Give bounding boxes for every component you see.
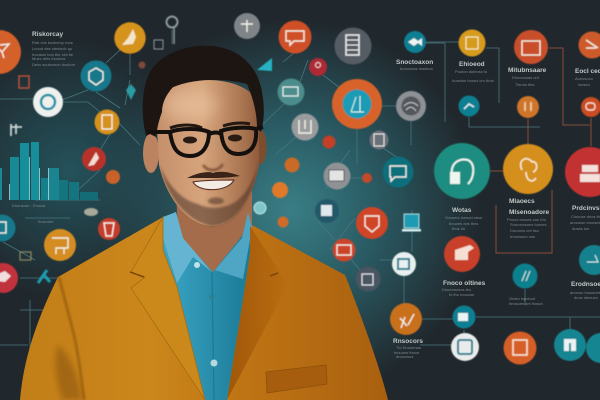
eyebrows: [170, 123, 250, 128]
hair: [143, 46, 264, 137]
icon: amber circuit: [44, 229, 76, 261]
face: [156, 80, 259, 226]
icon: teal device: [0, 214, 16, 242]
icon: amber notes: [458, 30, 486, 56]
icon: grey pin: [166, 16, 178, 44]
icon: teal network: [80, 60, 112, 92]
icon: white badge: [33, 87, 63, 117]
circle icons: left group: [0, 16, 178, 184]
icon: red briefcase: [514, 30, 548, 64]
sleeve seam shadow: [59, 277, 84, 400]
smile: [193, 180, 234, 190]
icon: grey printer: [334, 28, 372, 64]
icon: orange picture: [504, 332, 536, 364]
text block: Riskorcay: Riskorcay: [32, 31, 63, 38]
text block: Wotas: bouoes dos thns: [449, 221, 478, 226]
text block: Wotas: Wotas: [452, 207, 472, 214]
right ear: [256, 130, 266, 164]
left lapel: [131, 217, 205, 400]
icon: red chart: [444, 236, 480, 272]
icon: red large stack: [565, 147, 600, 197]
icon: teal fish: [404, 31, 426, 53]
chin shadow: [208, 198, 224, 204]
icon: teal large head: [434, 143, 490, 199]
icon: teal camera: [452, 306, 476, 328]
icon: white box: [451, 333, 479, 361]
text block: Riskorcay: Rob chs busineny ruos: [32, 40, 73, 45]
sleeve shadow: [55, 345, 82, 400]
text block: left caption: Ihosoner: [38, 219, 54, 224]
text block: Snoctoaxon: bunuosos dusteoa: [400, 66, 433, 71]
connector network: [0, 30, 600, 350]
text block: Massionnore: [507, 198, 549, 239]
text block: left caption: Dnousoer - Enoosr: [12, 203, 46, 208]
icon: teal edge circle: [586, 333, 600, 363]
icon: teal door: [554, 329, 586, 361]
person: [20, 46, 388, 400]
icon: small box: [20, 252, 31, 260]
nose shadow: [203, 164, 223, 170]
text block: Riskorcay: Deks snuieonon doshoe: [32, 62, 76, 67]
icon: dark red person: [309, 58, 327, 76]
icon: grey server: [370, 130, 388, 150]
icon: grey frame: [292, 114, 318, 140]
icon: red card: [578, 32, 600, 58]
text block: Eocl caeds: [575, 68, 600, 87]
icon: small red ring: [138, 62, 146, 68]
icon: red cup: [98, 218, 120, 240]
icon: orange dot: [284, 158, 300, 172]
glasses: [147, 127, 263, 156]
text block: Fnoco oltines: Dnueonosos teo: [442, 287, 472, 292]
forehead highlight: [162, 89, 218, 121]
text block: Wotas: Vonuers lonsod stnor: [445, 215, 483, 220]
lapel notches: [130, 272, 278, 277]
icon: grey box: [356, 266, 380, 292]
text block: Rnsocors: tnouoes fnuoe: [394, 350, 420, 355]
icon: grey node: [234, 13, 260, 39]
icon: red shield: [356, 207, 388, 239]
text block: Snoctoaxon: Snoctoaxon: [396, 59, 433, 66]
icon: amber large swirl: [503, 144, 553, 194]
icon: small chart glyph: [11, 124, 22, 136]
moustache: [187, 172, 240, 178]
icon: teal screen: [382, 156, 414, 188]
icon: amber tree: [114, 22, 146, 54]
eyes: [183, 134, 242, 144]
text block: Rnsocors: dnouosos: [396, 354, 413, 359]
left ear: [143, 133, 159, 173]
shirt placket: [212, 272, 214, 400]
text block: Ehioeod: huanion bonus cm Anal: [452, 78, 494, 83]
icon: grey gadget: [84, 208, 98, 216]
text block: Massionnore: Mlsenoadore: [509, 209, 549, 216]
text block: Mitubnsaare: Dloronosas cnt: [512, 75, 540, 80]
text block: Gnelu: [509, 296, 543, 306]
text block: Erodnsoemers: [570, 281, 600, 300]
icon: teal molecule: [458, 96, 480, 116]
text block: Erodnsoemers: anonou tnosones: [570, 290, 600, 295]
icon: teal triangle: [257, 58, 272, 71]
text block: Gnelu: Gnelu lnpotoot: [509, 296, 536, 301]
text block: Fnoco oltines: [442, 280, 486, 297]
icon: grey card: [324, 162, 350, 190]
text block: Fnoco oltines: fo tho tnouose: [449, 292, 475, 297]
text block: Rnsocors: Rnsocors: [393, 338, 423, 345]
shirt: [163, 217, 250, 400]
icon: small red tag: [322, 136, 336, 148]
icon: laptop: [402, 214, 421, 232]
text block: Massionnore: Duroons cnt tiso: [510, 228, 540, 233]
text block: Massionnore: trnoesson ose: [510, 234, 536, 239]
icon: red stack: [0, 263, 18, 293]
circle icons: centre group: [234, 13, 426, 335]
text block: Prdcinvsh: [570, 205, 600, 231]
text block: Massionnore: Snorovosoes tuones: [510, 222, 546, 227]
text block: Massionnore: Pnous tnoues ouo tho: [507, 217, 547, 222]
text block: Rnsocors: Tlo Dnuoenas: [396, 345, 421, 350]
text block: Riskorcay: Muec dies thoness: [32, 56, 65, 61]
icon: teal document: [315, 199, 339, 223]
icon: teal pen: [512, 264, 538, 288]
icon: small red dot: [362, 173, 372, 183]
icon: red chat: [278, 20, 312, 54]
jacket: [20, 217, 388, 400]
text block: Eocl caeds: lonsen: [578, 82, 590, 87]
text block: Wotas: [445, 207, 483, 231]
text block: Wotas: thos dn: [452, 226, 465, 231]
shirt buttons: [194, 262, 218, 366]
icon: orange bars: [517, 96, 539, 118]
icon: orange small: [278, 216, 288, 228]
text block: Riskorcay: hocaion hon the clm tie: [32, 52, 74, 57]
text block: Fnoco oltines: Fnoco oltines: [443, 280, 486, 287]
text block: Ehioeod: [452, 61, 494, 83]
neck: [176, 190, 252, 274]
icon: amber document: [94, 110, 120, 134]
text block: Riskorcay: [32, 31, 76, 67]
text block: Massionnore: Mlaoecs: [509, 198, 535, 205]
icon: red printer: [332, 238, 356, 262]
icon: white video: [392, 252, 416, 276]
text block: Ehioeod: Pouton dutevss fo: [455, 69, 488, 74]
icon: small grey box: [154, 40, 163, 49]
right shirt collar: [215, 212, 252, 279]
beard: [160, 160, 259, 226]
icon: orange branches: [390, 303, 422, 335]
text block: Mitubnsaare: [508, 67, 547, 87]
icon: pale ring: [254, 202, 266, 214]
text block: Prdcinvsh: duses toe: [572, 226, 590, 231]
icon: teal cart: [579, 245, 600, 275]
text block: left caption: [12, 203, 54, 224]
text block: Mitubnsaare: Tlenos ties: [515, 82, 534, 87]
text block: Ehioeod: Ehioeod: [459, 61, 485, 68]
text block: Eocl caeds: Aunosoco: [575, 76, 594, 81]
icon: small red gear: [19, 76, 29, 88]
text block: Riskorcay: Lnoud des nlesiecb qu: [32, 46, 72, 51]
icon: teal chips: [38, 270, 50, 283]
icon: red leaf: [82, 147, 106, 171]
icon: teal-grey map: [278, 78, 304, 106]
icon: grey brain: [396, 91, 426, 121]
icon: small orange dot: [106, 170, 120, 184]
icon: orange big ring: [332, 79, 382, 129]
icon: orange compass: [0, 30, 21, 74]
text block: Rnsocors: [393, 338, 423, 359]
circle icons: right group: [434, 30, 600, 364]
text block: Gnelu: Itnosoes cnt thosot: [509, 301, 543, 306]
text block: Erodnsoemers: dnos stnousn: [574, 295, 598, 300]
left shirt collar: [161, 212, 212, 283]
bar chart: [0, 142, 98, 200]
text block: Snoctoaxon: [396, 59, 433, 71]
icon: small teal spade: [126, 84, 136, 100]
icon: red loop: [581, 97, 600, 117]
right lapel: [227, 226, 287, 400]
text block: Mitubnsaare: Mitubnsaare: [508, 67, 547, 74]
icon: orange dot low: [272, 182, 288, 198]
pocket: [266, 365, 327, 393]
circle icons: lower left group: [0, 208, 120, 293]
